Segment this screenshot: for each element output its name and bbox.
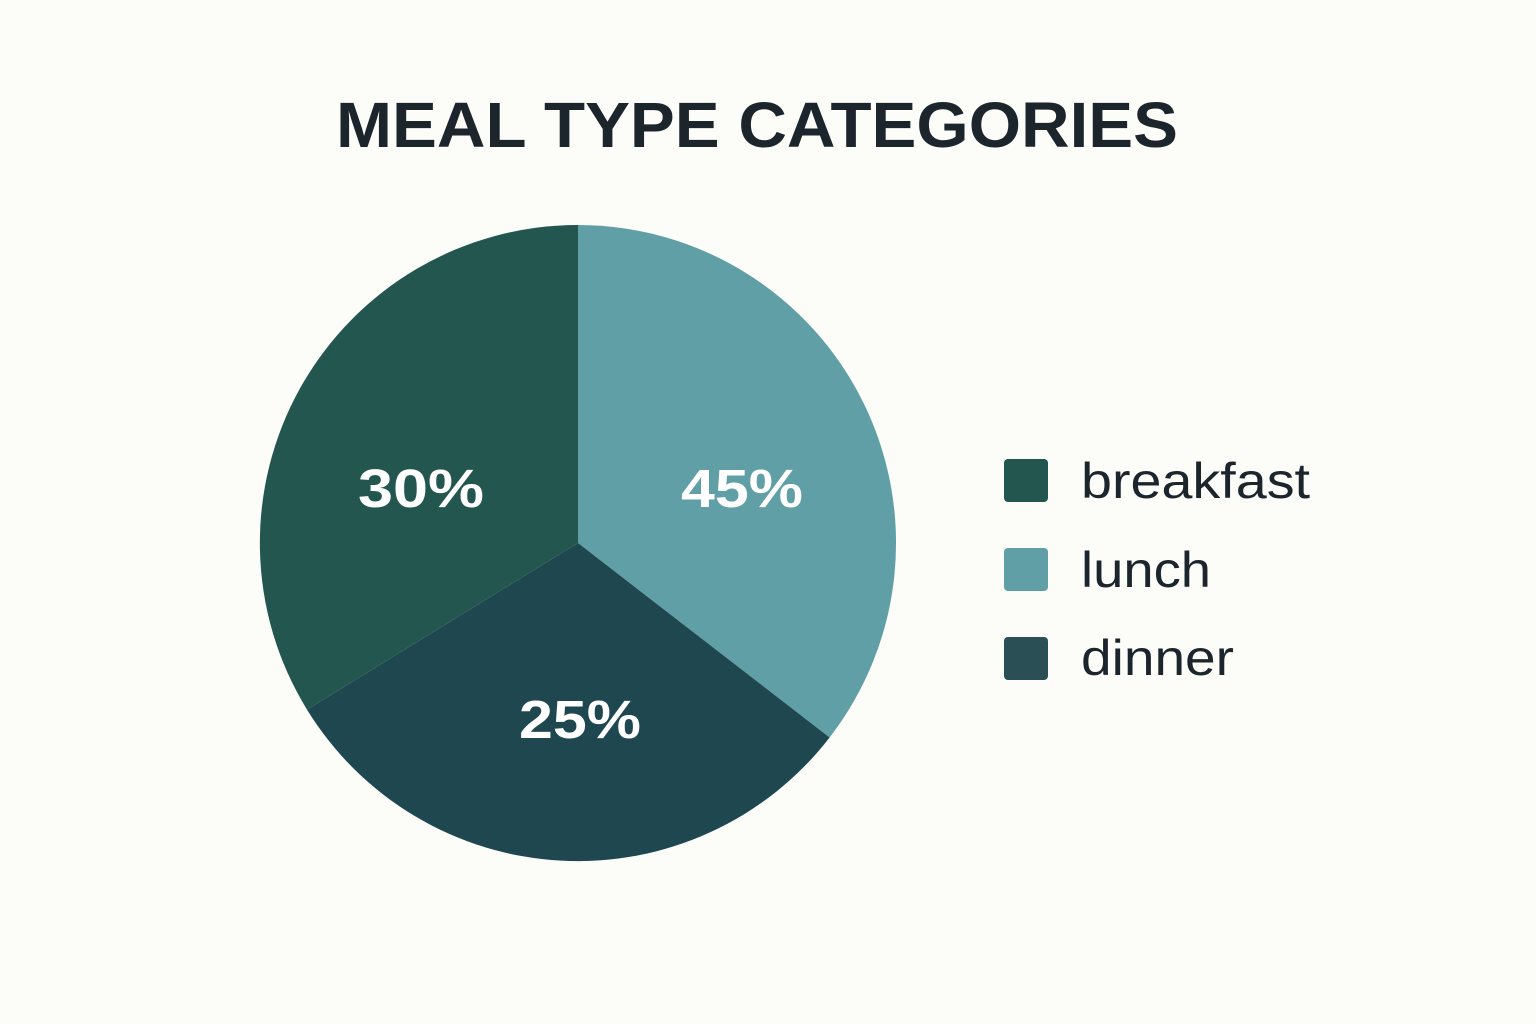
slice: lunch 45%: [578, 225, 896, 737]
label: 25%: 25%: [519, 690, 641, 750]
legend item: lunch: [1004, 542, 1211, 598]
legend: [1004, 453, 1310, 686]
slice: breakfast 30%: [260, 225, 578, 710]
title: MEAL TYPE CATEGORIES: [336, 89, 1178, 161]
legend item: dinner: [1004, 630, 1234, 686]
label: 30%: 30%: [358, 459, 484, 519]
legend item: lunch: lunch: [1081, 542, 1211, 598]
label: 45%: 45%: [681, 459, 803, 519]
pie chart: [260, 225, 896, 861]
legend item: dinner: dinner: [1081, 630, 1234, 686]
legend item: breakfast: [1004, 453, 1310, 509]
legend item: breakfast: breakfast: [1081, 453, 1310, 509]
slice: dinner 25%: [307, 543, 830, 861]
